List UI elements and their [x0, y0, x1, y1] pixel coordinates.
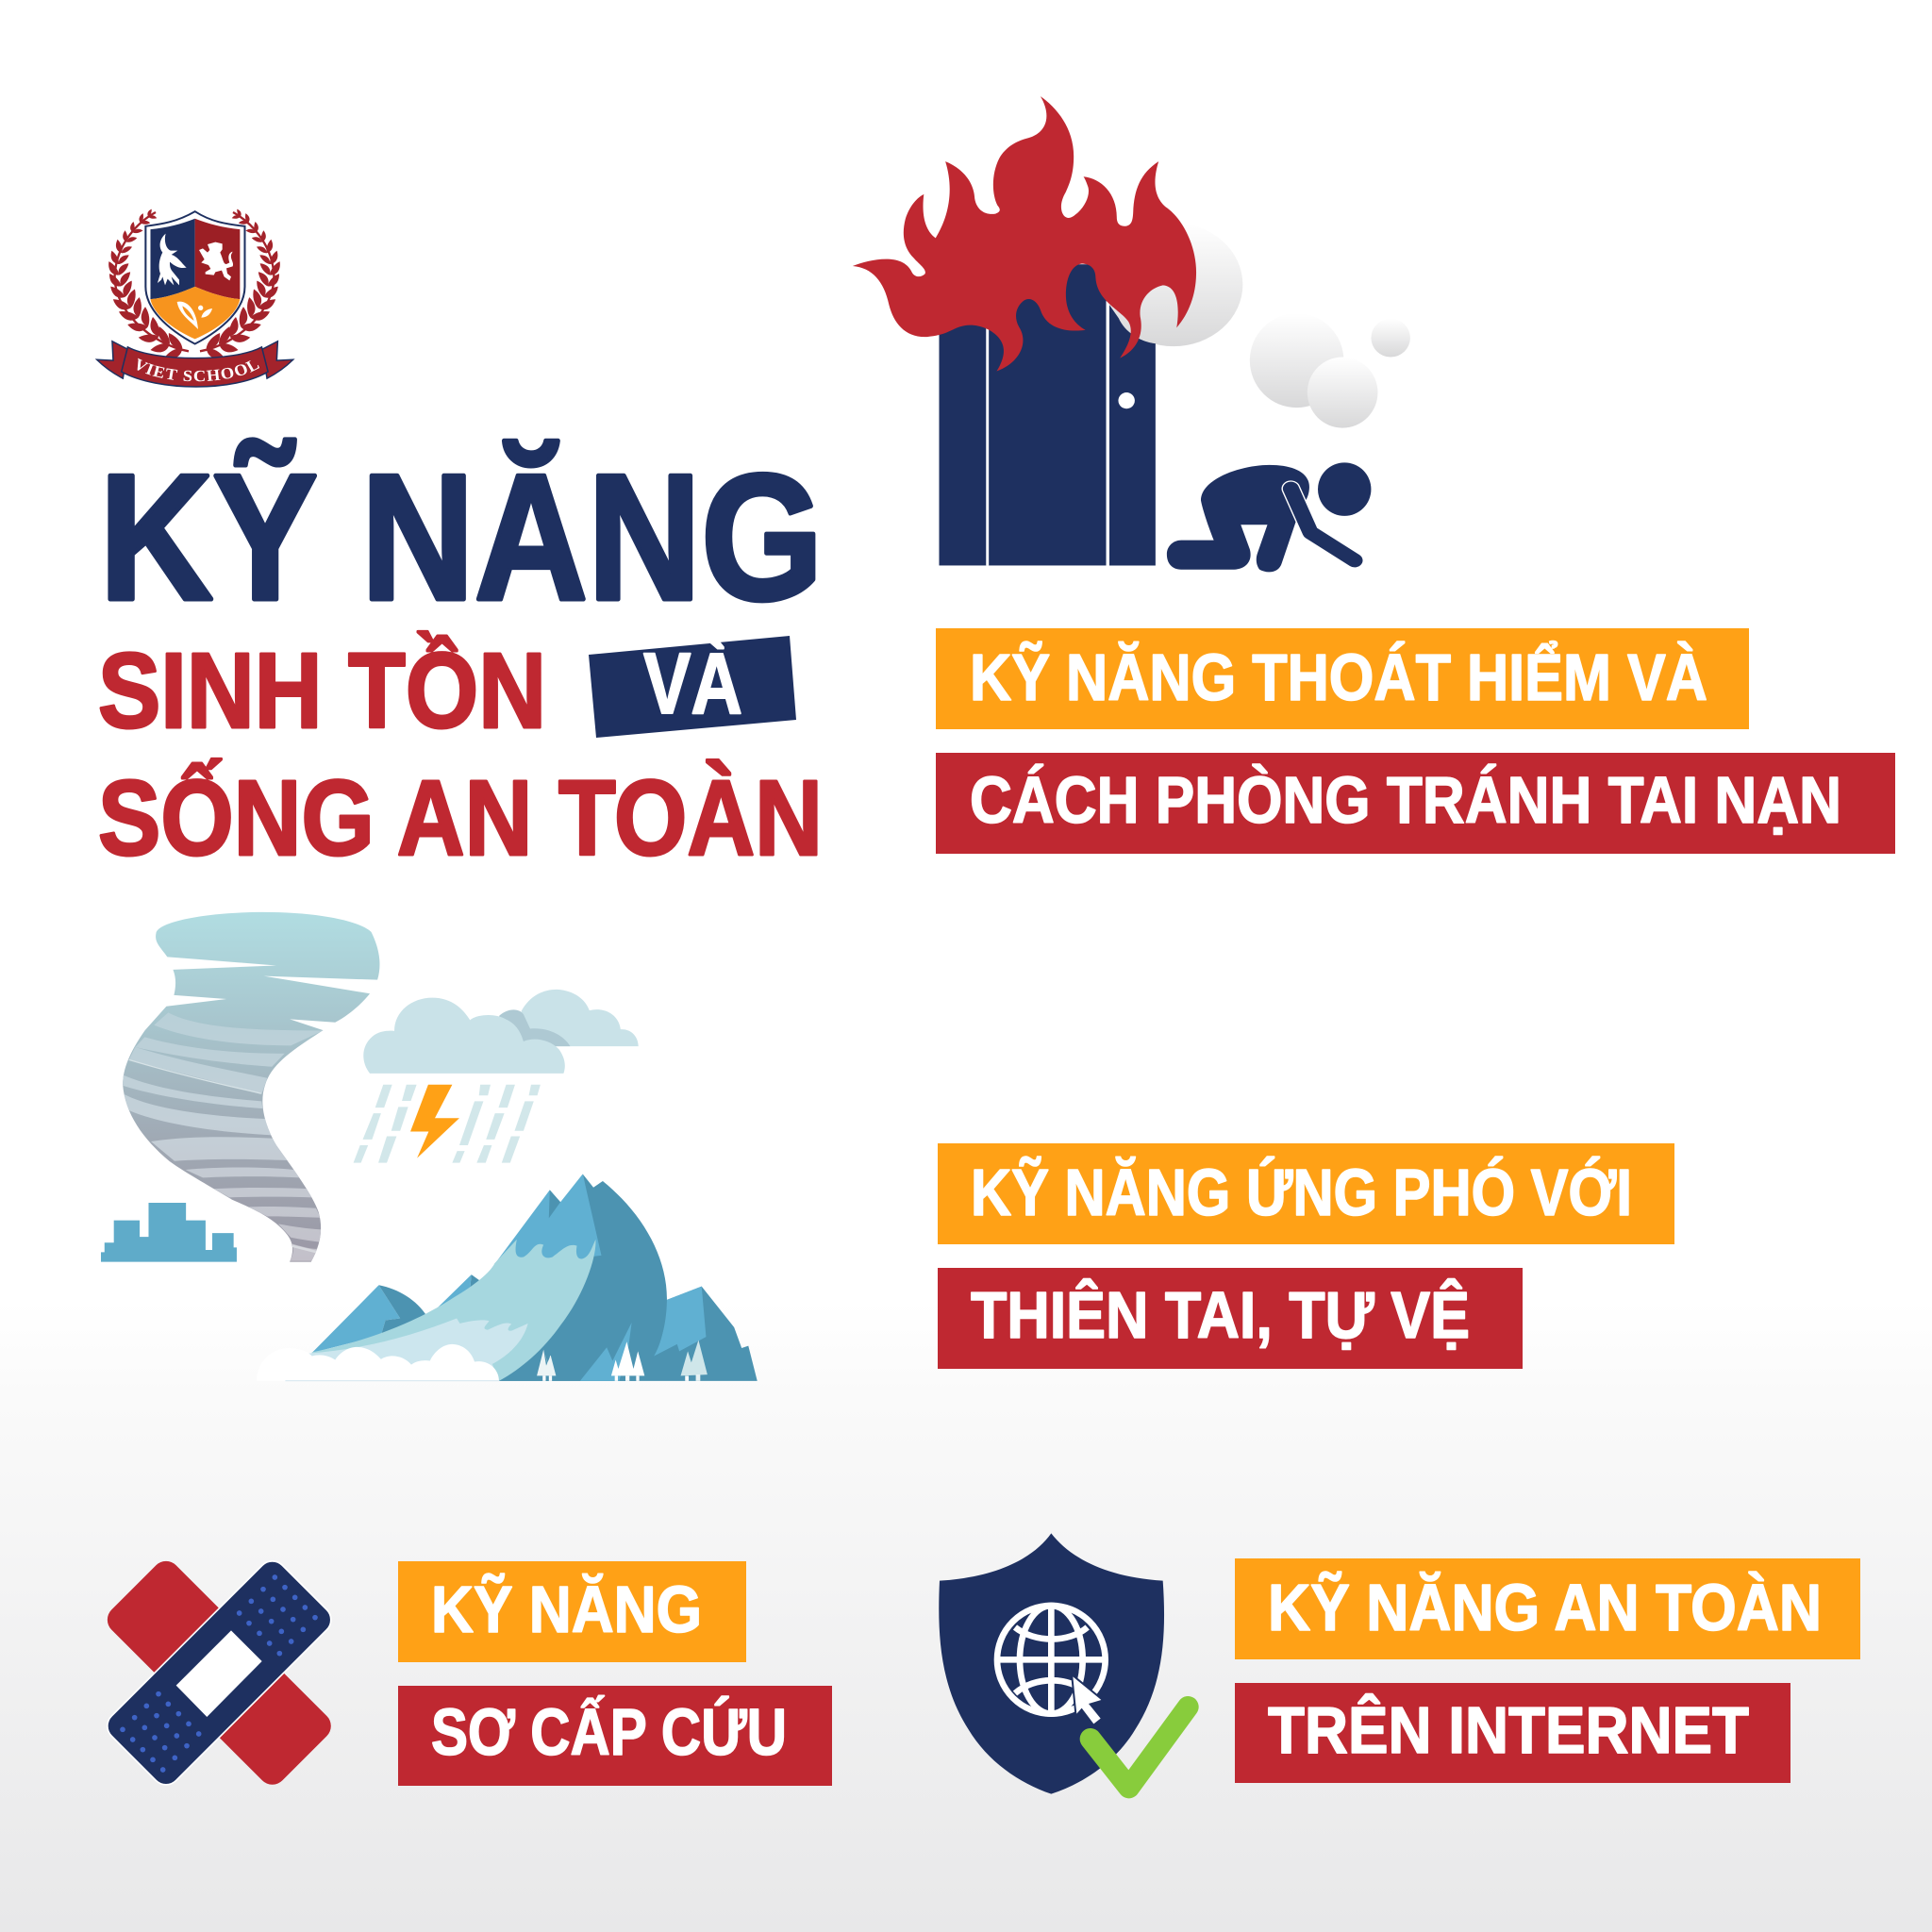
label: accident prevention: CÁCH PHÒNG TRÁNH TAI NẠN — [970, 763, 1841, 837]
icon: cursor — [1073, 1676, 1101, 1724]
icon: internet security shield — [939, 1533, 1188, 1794]
icon: laurel wreath — [106, 208, 283, 362]
label: disaster response — [938, 1143, 1674, 1244]
label: internet safety line 2 — [1235, 1683, 1790, 1783]
title: KỸ NĂNG: KỸ NĂNG — [100, 438, 823, 638]
label: first aid line 1: KỸ NĂNG — [431, 1573, 702, 1646]
title tag: VÀ — [589, 636, 796, 738]
label: first aid line 1 — [398, 1561, 746, 1662]
illustration: burning door and crawling person — [853, 96, 1410, 572]
illustration: natural disasters — [101, 912, 758, 1381]
label: escape skills: KỸ NĂNG THOÁT HIỂM VÀ — [970, 640, 1707, 714]
ribbon text: VIET SCHOOL — [138, 358, 260, 381]
label: accident prevention — [936, 753, 1895, 854]
icon: tornado — [123, 912, 379, 1262]
icon: crossed bandages — [102, 1556, 337, 1790]
icon: ribbon — [94, 340, 295, 388]
icon: crawling person — [1167, 462, 1371, 572]
logo: Viet School crest — [94, 209, 295, 388]
label: escape skills — [936, 628, 1749, 729]
icon: phoenix, lion and sprout emblems — [158, 234, 233, 329]
icon: globe — [997, 1606, 1106, 1714]
icon: mountains and avalanche — [257, 1174, 758, 1381]
title: SỐNG AN TOÀN: SỐNG AN TOÀN — [98, 758, 823, 877]
label: internet safety line 2: TRÊN INTERNET — [1268, 1692, 1749, 1767]
title: SINH TỒN: SINH TỒN — [98, 631, 546, 750]
label: internet safety line 1 — [1235, 1558, 1860, 1659]
icon: storm clouds — [363, 990, 639, 1074]
icon: city skyline — [101, 1203, 237, 1262]
icon: flames — [853, 96, 1196, 372]
label: first aid line 2: SƠ CẤP CỨU — [431, 1695, 787, 1769]
icon: door — [939, 264, 1156, 565]
icon: lightning bolt — [410, 1085, 459, 1158]
icon: smoke — [1105, 223, 1410, 428]
label: internet safety line 1: KỸ NĂNG AN TOÀN — [1268, 1571, 1822, 1644]
label: disaster response: KỸ NĂNG ỨNG PHÓ VỚI — [971, 1156, 1632, 1229]
label: self-defense: THIÊN TAI, TỰ VỆ — [971, 1277, 1470, 1352]
icon: shield — [145, 211, 244, 344]
icon: pine trees — [537, 1341, 708, 1381]
label: self-defense — [938, 1268, 1523, 1369]
label: first aid line 2 — [398, 1686, 832, 1786]
icon: rain — [354, 1085, 541, 1163]
title tag: VÀ: VÀ — [643, 636, 742, 732]
icon: green check mark — [1091, 1707, 1188, 1788]
